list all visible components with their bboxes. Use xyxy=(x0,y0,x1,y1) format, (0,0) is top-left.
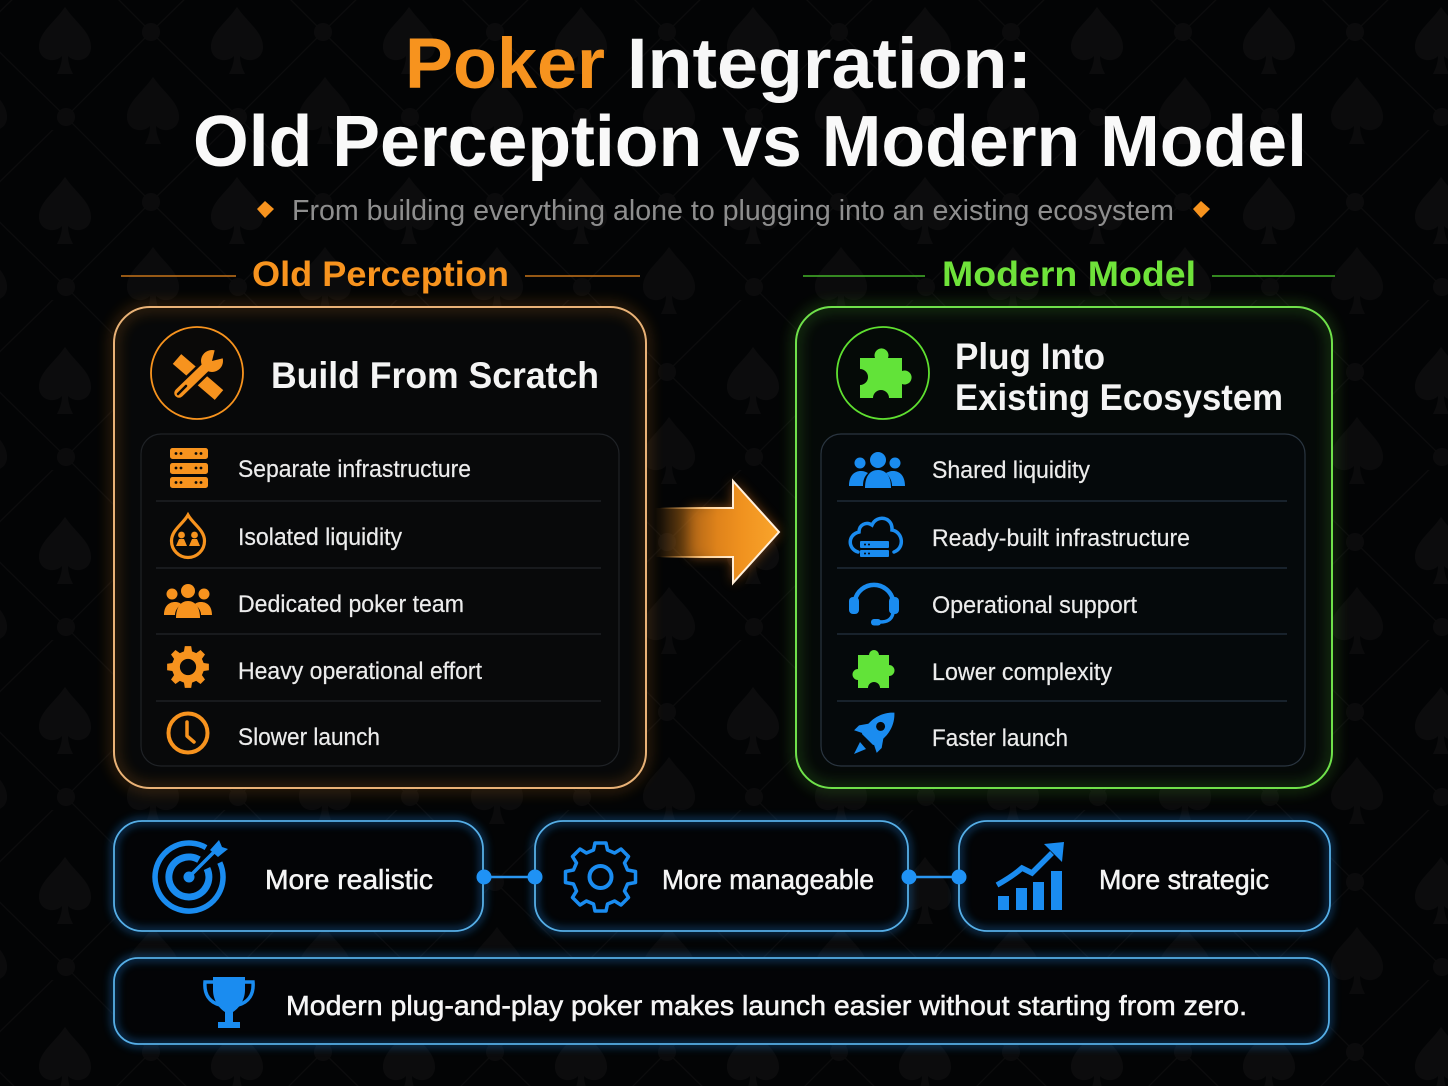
text: shared liquidity: Shared liquidity xyxy=(932,457,1090,484)
icon: outline gear xyxy=(566,843,636,911)
icon: tools in circle xyxy=(151,327,243,419)
heading: plug into existing ecosystem: Existing Ecosystem xyxy=(955,377,1283,418)
arrow: old to modern xyxy=(655,481,779,583)
text: ready-built infrastructure: Ready-built infrastructure xyxy=(932,525,1190,552)
card: more manageable xyxy=(535,821,908,931)
panel: old perception xyxy=(114,307,646,788)
connector dots xyxy=(476,870,966,884)
callout: conclusion bar xyxy=(114,958,1329,1044)
heading: plug into existing ecosystem xyxy=(955,336,1283,418)
text: slower launch: Slower launch xyxy=(238,724,380,751)
text: faster launch: Faster launch xyxy=(932,725,1068,752)
title: Integration: xyxy=(627,25,1032,104)
text: isolated liquidity: Isolated liquidity xyxy=(238,524,402,551)
connectors between benefit cards xyxy=(484,876,959,878)
subtitle: From building everything alone to plugging into an existing ecosystem xyxy=(292,195,1174,227)
text: more realistic: More realistic xyxy=(265,864,433,895)
heading: modern model: Modern Model xyxy=(942,255,1196,294)
icon: target xyxy=(155,840,228,911)
icon: server stack xyxy=(170,448,208,488)
list: old perception items xyxy=(141,434,619,766)
icon: trophy xyxy=(205,977,253,1028)
icon: rocket xyxy=(854,701,906,754)
title: Old Perception vs Modern Model xyxy=(193,102,1307,182)
icon: clock xyxy=(168,714,208,752)
icon: liquidity drop xyxy=(172,515,204,558)
icon: small puzzle xyxy=(852,650,894,688)
card: more realistic xyxy=(114,821,483,931)
heading: old perception: Old Perception xyxy=(252,255,509,294)
heading: plug into existing ecosystem: Plug Into xyxy=(955,336,1105,377)
text: operational support: Operational support xyxy=(932,592,1137,619)
text: dedicated poker team: Dedicated poker team xyxy=(238,591,464,618)
card: more strategic xyxy=(959,821,1330,931)
text: more manageable: More manageable xyxy=(662,864,874,895)
icon: gear xyxy=(167,646,209,688)
title xyxy=(193,25,1307,182)
text: lower complexity: Lower complexity xyxy=(932,659,1112,686)
icon: shared liquidity people xyxy=(849,452,905,488)
list: modern model items xyxy=(821,434,1305,766)
icon: growth chart xyxy=(997,842,1064,910)
panel: modern model xyxy=(796,307,1332,788)
icon: cloud servers xyxy=(850,518,901,557)
heading: build from scratch: Build From Scratch xyxy=(271,355,599,396)
icon: puzzle in circle xyxy=(837,327,929,419)
text: heavy operational effort: Heavy operational effort xyxy=(238,658,482,685)
title: Poker xyxy=(405,25,605,104)
text: separate infrastructure: Separate infrastructure xyxy=(238,456,471,483)
icon: team xyxy=(164,584,212,618)
text: conclusion: Modern plug-and-play poker makes launch easier without starting from zero. xyxy=(286,990,1247,1021)
icon: headset xyxy=(849,585,899,626)
text: more strategic: More strategic xyxy=(1099,864,1269,895)
